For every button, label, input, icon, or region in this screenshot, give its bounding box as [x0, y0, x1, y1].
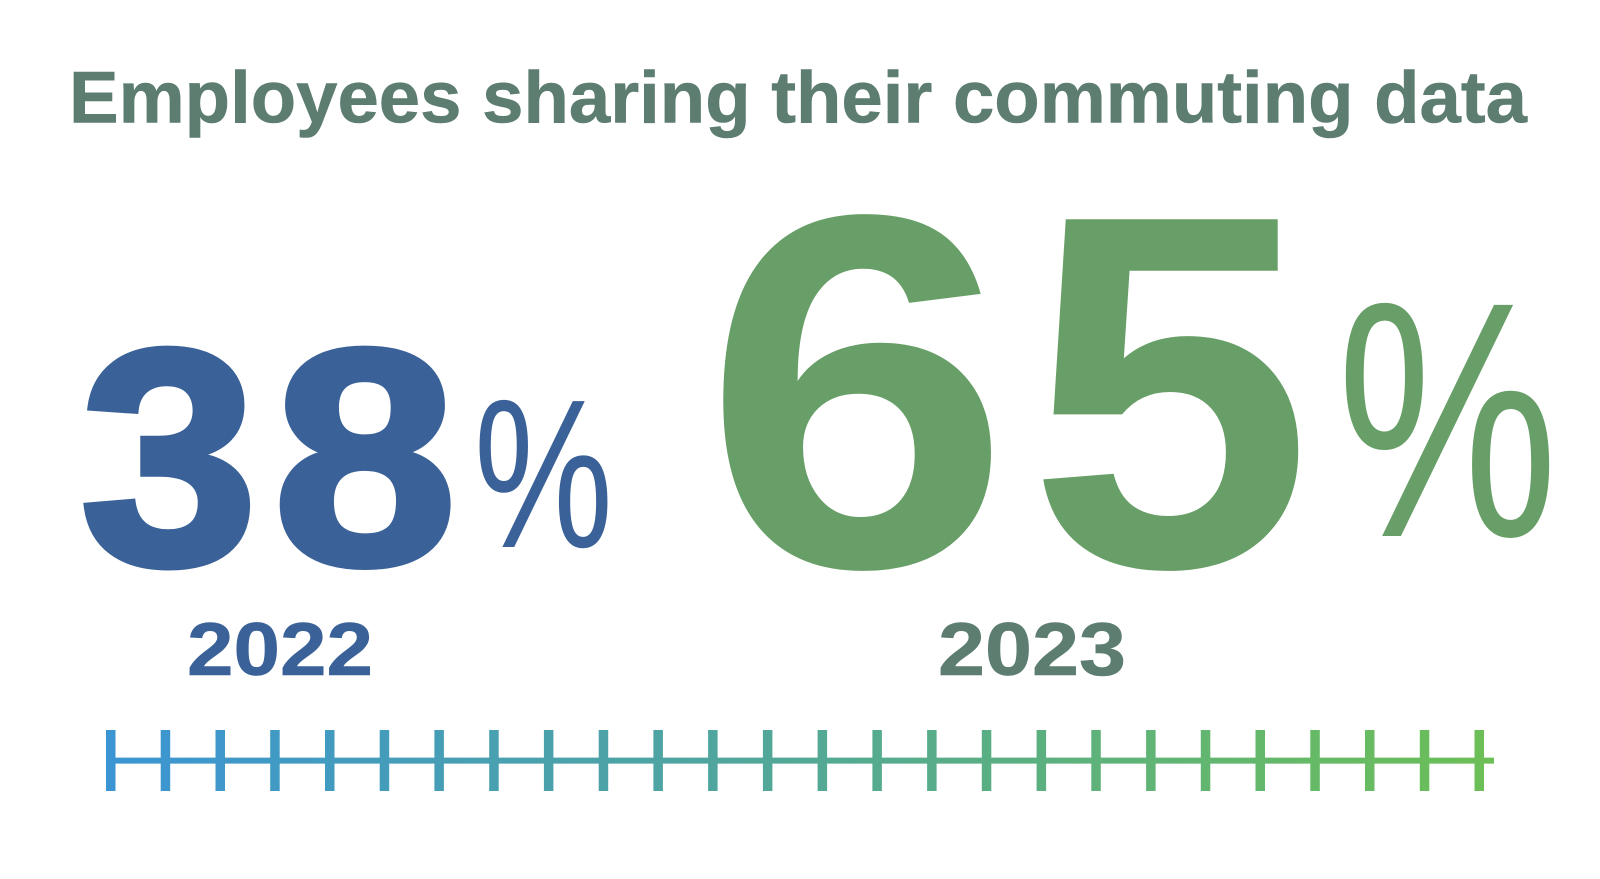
year 2023: 2023: [938, 607, 1126, 691]
number 65: 5: [1028, 110, 1312, 673]
percent sign 38: %: [474, 355, 613, 592]
timeline ruler with gradient: [106, 730, 1494, 791]
number 38: 8: [273, 286, 457, 630]
year 2022: 2022: [187, 607, 373, 691]
number 65: [703, 110, 1312, 673]
number 38: [80, 286, 457, 630]
stat: 65% in 2023: [703, 110, 1558, 691]
number 65: 6: [703, 110, 1011, 673]
number 38: 3: [80, 286, 258, 630]
title: Employees sharing their commuting data: [69, 58, 1528, 138]
stat: 38% in 2022: [80, 286, 613, 691]
